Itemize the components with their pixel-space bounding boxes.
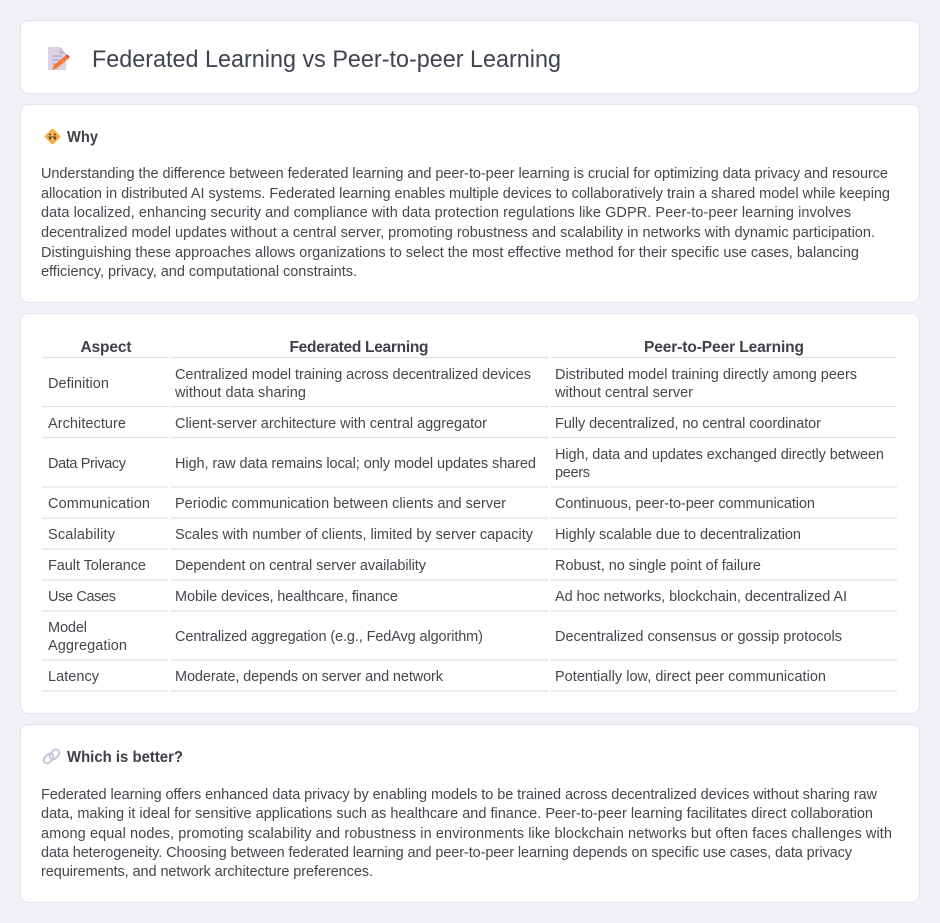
text block: why: data localized, enhancing security and compliance with data protection regulations like GDPR. Peer-to-peer learning involves <box>41 205 851 221</box>
row: model aggregation: Model <box>48 620 87 636</box>
row: model aggregation: Centralized aggregation (e.g., FedAvg algorithm) <box>175 629 483 645</box>
text block: why: decentralized model updates without a central server, promoting robustness and scalability in networks with dynamic participation. <box>41 225 875 241</box>
text block: which is better: requirements, and network architecture preferences. <box>41 864 373 880</box>
title: Federated Learning vs Peer-to-peer Learning <box>92 46 561 73</box>
row: scalability: Scales with number of clients, limited by server capacity <box>175 527 534 543</box>
row: definition <box>48 367 857 401</box>
text block: why: allocation in distributed AI systems. Federated learning enables multiple devices to collaboratively train a shared model while keeping <box>41 186 890 202</box>
text block: which is better <box>41 787 892 880</box>
table header: Peer-to-Peer Learning <box>644 339 804 356</box>
row: definition: Distributed model training directly among peers <box>555 367 857 383</box>
row: definition: without central server <box>554 385 693 401</box>
panel: header <box>20 20 920 94</box>
text block: which is better: data heterogeneity. Choosing between federated learning and peer-to-peer learning depends on specific use cases, data privacy <box>41 845 853 861</box>
row: communication <box>48 496 815 512</box>
icon: chain link <box>42 748 61 765</box>
text block: why: efficiency, privacy, and computational constraints. <box>41 264 357 280</box>
row: latency: Latency <box>48 669 100 685</box>
row: model aggregation <box>48 620 842 654</box>
row: data privacy: Data Privacy <box>48 456 127 472</box>
row: architecture: Architecture <box>48 416 126 432</box>
text block: which is better: Federated learning offers enhanced data privacy by enabling models to be trained across decentralized devices without sharing raw <box>41 787 878 803</box>
panel: why <box>20 104 920 302</box>
panel: which is better <box>20 724 920 902</box>
row: architecture: Client-server architecture with central aggregator <box>175 416 487 432</box>
text block: which is better: data, making it ideal for sensitive applications such as healthcare and finance. Peer-to-peer learning facilitates direct collaboration <box>41 806 873 822</box>
text block: which is better: among equal nodes, promoting scalability and robustness in environments like blockchain networks but often faces challenges with <box>41 826 892 842</box>
text block: why: Distinguishing these approaches allows organizations to select the most effective method for their specific use cases, balancing <box>41 245 859 261</box>
row: scalability: Scalability <box>48 527 116 543</box>
row: architecture: Fully decentralized, no central coordinator <box>555 416 821 432</box>
row: use cases: Mobile devices, healthcare, finance <box>175 589 398 605</box>
row: communication: Communication <box>48 496 150 512</box>
text block: why: Understanding the difference between federated learning and peer-to-peer learning is crucial for optimizing data privacy and resource <box>41 166 888 182</box>
row: communication: Continuous, peer-to-peer communication <box>555 496 815 512</box>
table header: Federated Learning <box>290 339 428 356</box>
row: architecture <box>48 416 821 432</box>
row: fault tolerance: Robust, no single point of failure <box>555 558 761 574</box>
row: definition: Centralized model training across decentralized devices <box>175 367 531 383</box>
row: use cases <box>48 589 847 605</box>
row: use cases: Ad hoc networks, blockchain, decentralized AI <box>555 589 847 605</box>
icon: document with pencil <box>48 47 70 70</box>
row: latency: Potentially low, direct peer communication <box>555 669 826 685</box>
heading: why: Why <box>67 129 98 146</box>
row: data privacy: High, raw data remains local; only model updates shared <box>175 456 536 472</box>
row: data privacy: peers <box>555 465 590 481</box>
row: communication: Periodic communication between clients and server <box>175 496 506 512</box>
row: data privacy: High, data and updates exchanged directly between <box>555 447 884 463</box>
row: use cases: Use Cases <box>48 589 116 605</box>
heading: which is better: Which is better? <box>67 749 183 766</box>
text block: why <box>41 166 890 280</box>
row: data privacy <box>48 447 884 481</box>
row: definition: Definition <box>48 376 109 392</box>
row: fault tolerance: Dependent on central server availability <box>175 558 427 574</box>
row: fault tolerance <box>48 558 761 574</box>
row: model aggregation: Decentralized consensus or gossip protocols <box>555 629 842 645</box>
panel: comparison table <box>20 314 920 714</box>
table header <box>80 339 804 356</box>
row: fault tolerance: Fault Tolerance <box>48 558 146 574</box>
row: latency <box>48 669 826 685</box>
row: latency: Moderate, depends on server and network <box>175 669 444 685</box>
table header: Aspect <box>80 339 132 356</box>
row: scalability <box>48 527 801 543</box>
row: model aggregation: Aggregation <box>48 638 127 654</box>
row: scalability: Highly scalable due to decentralization <box>555 527 801 543</box>
icon: warning diamond <box>44 128 61 145</box>
row: definition: without data sharing <box>174 385 306 401</box>
